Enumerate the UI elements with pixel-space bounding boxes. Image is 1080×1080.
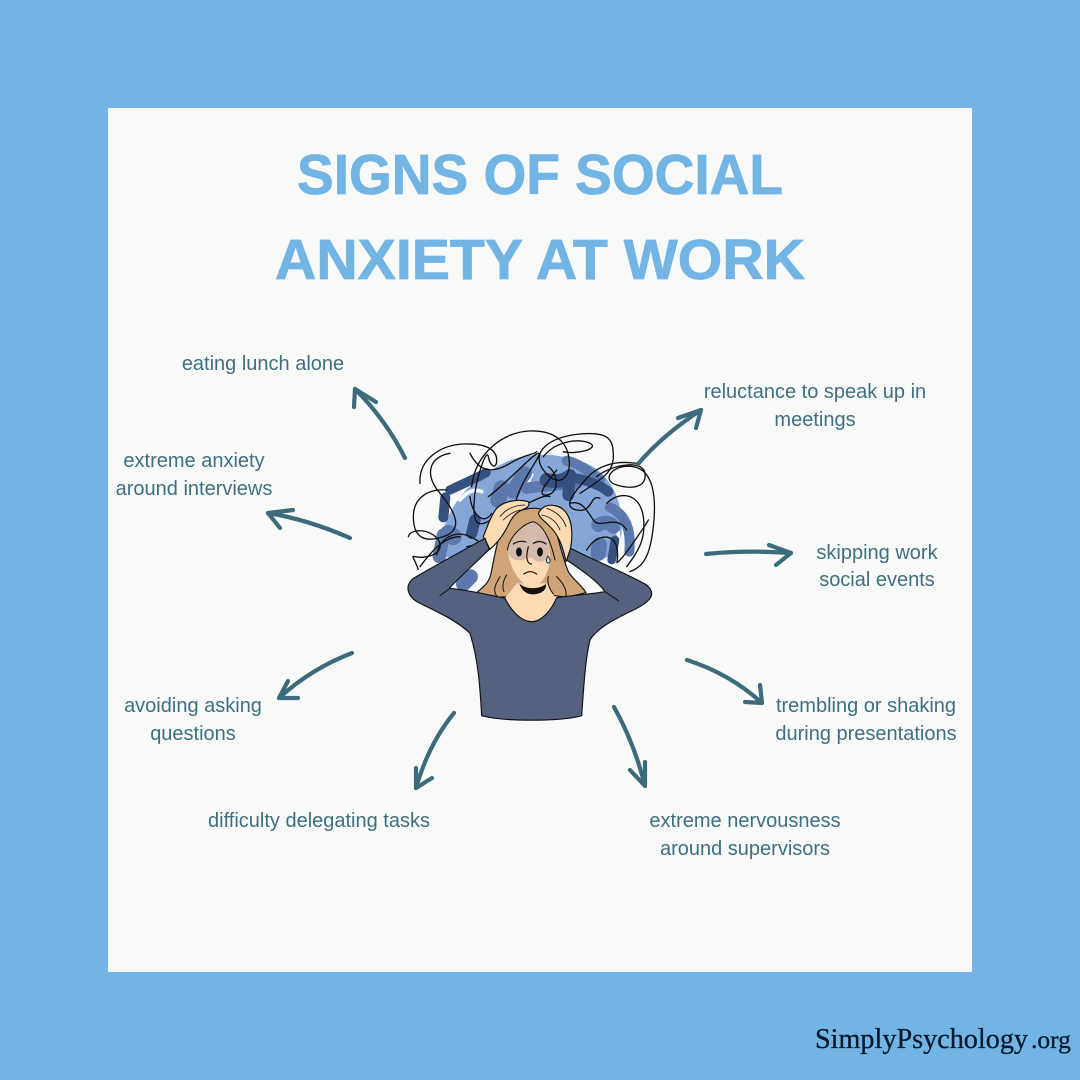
label: reluctance to speak up in meetings: reluctance to speak up in <box>704 381 926 403</box>
left hand finger lines <box>500 505 525 520</box>
label: difficulty delegating tasks: difficulty delegating tasks <box>208 810 430 832</box>
panel: main white card <box>108 108 972 972</box>
sweater fold lines <box>440 588 618 601</box>
arrow: extreme nervousness <box>614 707 645 786</box>
arrow: skipping work social events <box>706 545 791 565</box>
label: extreme nervousness around supervisors: extreme nervousness <box>649 810 841 832</box>
illustration: stressed woman with scribbles <box>408 431 654 720</box>
label: eating lunch alone: eating lunch alone <box>182 353 344 375</box>
label: avoiding asking questions: avoiding asking <box>124 695 262 717</box>
jaw shadow <box>519 583 546 594</box>
arrow: avoiding asking questions <box>279 653 352 698</box>
neck <box>505 583 557 622</box>
label: extreme anxiety around interviews <box>116 450 272 500</box>
label: extreme nervousness around supervisors <box>649 810 841 860</box>
label: avoiding asking questions: questions <box>150 723 236 745</box>
arrow: extreme anxiety around interviews <box>268 510 350 538</box>
label: skipping work social events: skipping work <box>816 542 939 564</box>
tired face shading <box>507 522 549 562</box>
label: reluctance to speak up in meetings <box>704 381 926 431</box>
label: reluctance to speak up in meetings: meetings <box>774 409 856 431</box>
title <box>275 143 805 292</box>
watermark: SimplyPsychology.org <box>815 1024 1071 1055</box>
label: avoiding asking questions <box>124 695 262 745</box>
label: extreme nervousness around supervisors: around supervisors <box>660 838 830 860</box>
title: ANXIETY AT WORK <box>275 228 805 292</box>
hair <box>477 508 586 597</box>
label: extreme anxiety around interviews: extreme anxiety <box>123 450 265 472</box>
arrow: reluctance to speak up <box>638 410 701 464</box>
title: SIGNS OF SOCIAL <box>297 143 783 207</box>
label: extreme anxiety around interviews: around interviews <box>116 478 272 500</box>
label: trembling or shaking during presentations <box>775 695 957 745</box>
black scribble lines <box>408 431 654 572</box>
arrow: difficulty delegating <box>416 713 454 788</box>
arrow: trembling or shaking <box>687 660 762 703</box>
right hand finger lines <box>542 508 566 530</box>
label: trembling or shaking during presentations: during presentations <box>775 723 957 745</box>
blue thought blobs <box>439 455 630 584</box>
arrow: eating lunch alone <box>354 389 405 458</box>
facial features <box>513 541 550 574</box>
sweater <box>408 538 652 720</box>
label: skipping work social events <box>816 542 939 591</box>
hand left <box>483 500 529 549</box>
hair strands <box>495 522 566 596</box>
label: trembling or shaking during presentations: trembling or shaking <box>776 695 956 717</box>
face and neck <box>507 522 550 588</box>
hand right <box>538 505 572 562</box>
label: skipping work social events: social events <box>819 569 935 591</box>
